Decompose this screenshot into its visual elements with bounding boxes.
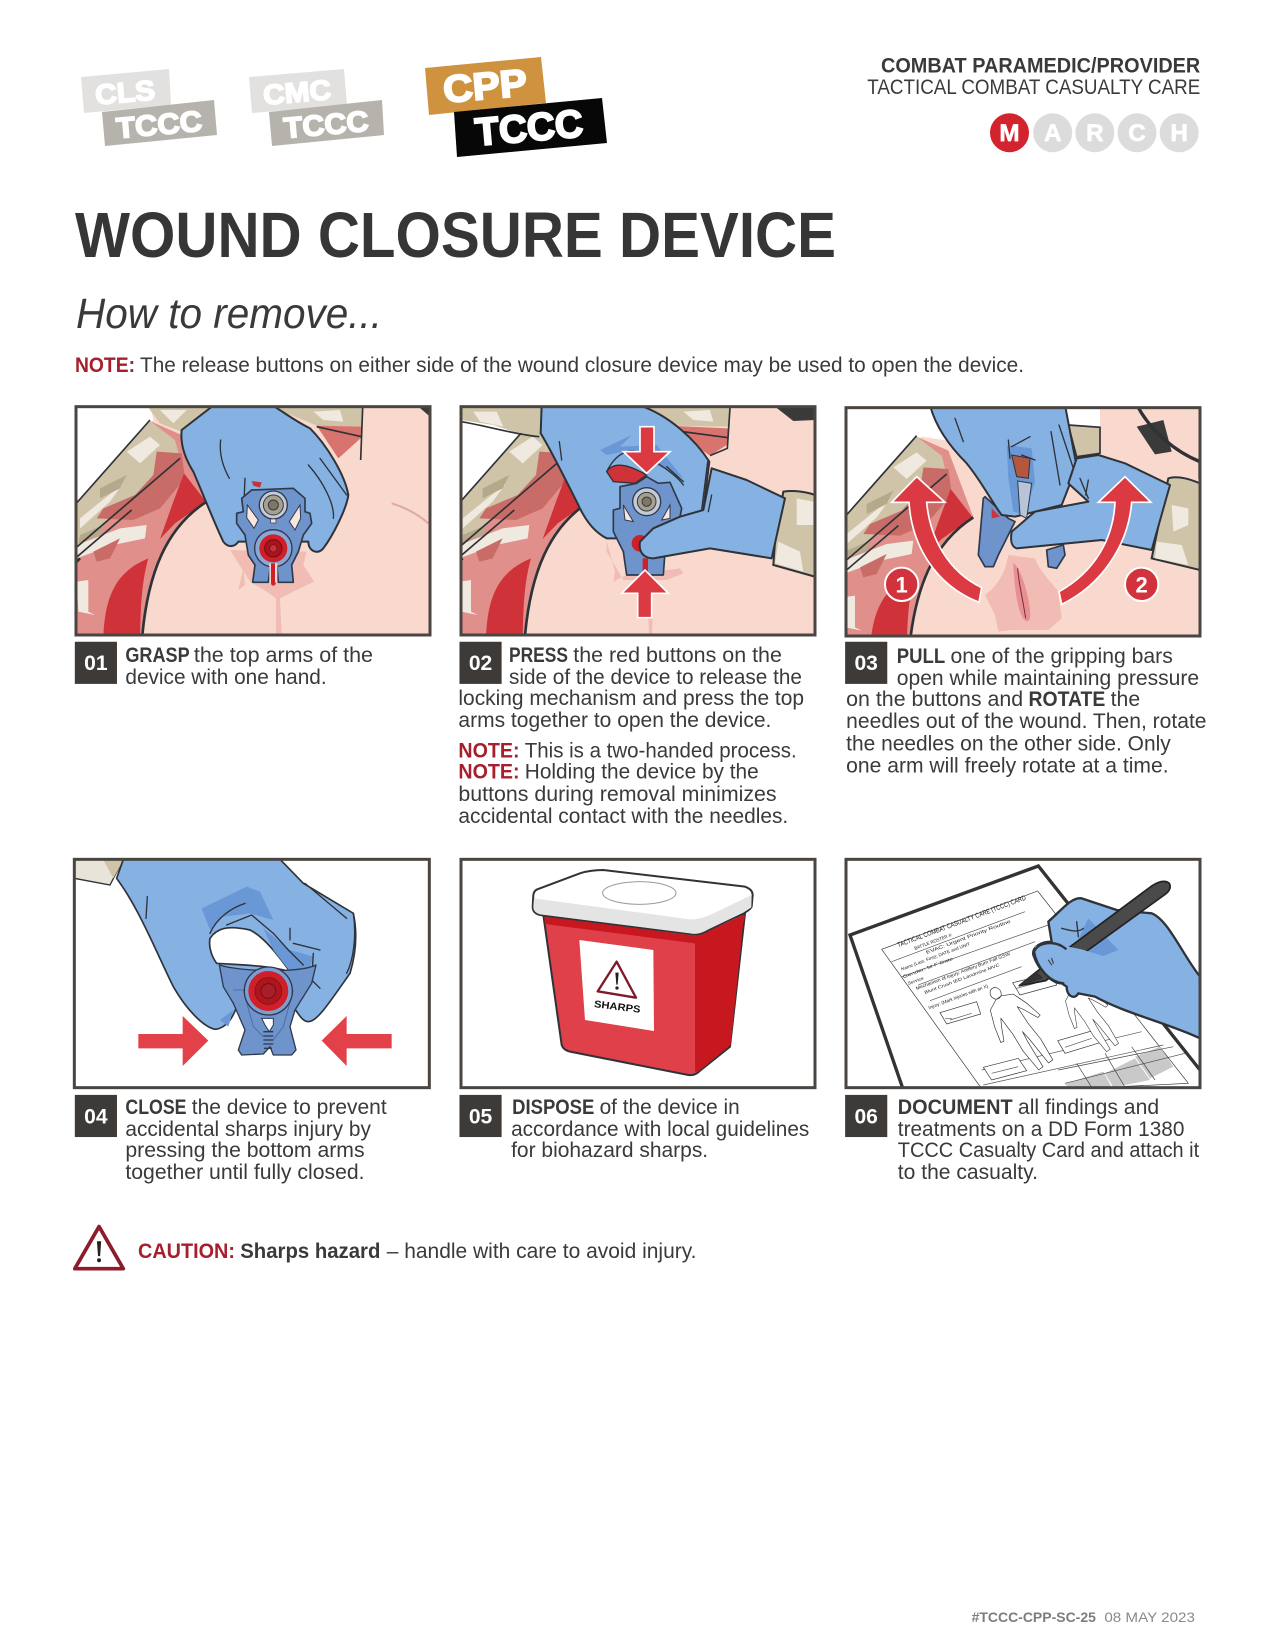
casualty card form: Mechanism of Injury: Artillery Burn Fall GSW (915, 951, 1011, 991)
M active (990, 113, 1029, 152)
step 02 text: NOTE: (458, 739, 520, 763)
step 03 text: the (1111, 687, 1140, 711)
illustration: grasp device (74, 405, 432, 636)
A: A (1044, 120, 1061, 147)
illustration: press buttons (460, 405, 816, 636)
step number 02: 02 (469, 652, 492, 675)
R: R (1086, 120, 1104, 147)
logo: CMC TCCC: TCCC (282, 106, 370, 145)
step 01 text: device with one hand. (125, 665, 327, 689)
illustration: close device (74, 859, 429, 1088)
step 04 text: CLOSE (125, 1095, 187, 1119)
logo: CPP TCCC (425, 57, 607, 157)
caution text: CAUTION: (138, 1239, 235, 1263)
step 05 text: for biohazard sharps. (511, 1138, 708, 1162)
logo: CPP TCCC: CPP (442, 62, 529, 112)
step 02 text: locking mechanism and press the top (458, 686, 804, 710)
step 06 text: TCCC Casualty Card and attach it (898, 1138, 1199, 1162)
step 04 text: accidental sharps injury by (125, 1117, 371, 1141)
step 03 text (846, 644, 1207, 777)
casualty card form: Blunt Crush IED Landmine MVC (924, 962, 1000, 995)
step 03 text: PULL (897, 644, 945, 668)
illustration: document on casualty card (846, 859, 1200, 1093)
step 03 text: on the buttons and (846, 687, 1023, 711)
casualty card form: Service (907, 975, 925, 986)
step number 04: 04 (84, 1105, 108, 1128)
H: H (1170, 120, 1188, 147)
step 02 text: side of the device to release the (509, 665, 802, 689)
logo: CLS TCCC: TCCC (115, 106, 203, 145)
casualty card form: BATTLE ROSTER #: (914, 932, 953, 951)
step number 01: 01 (84, 652, 108, 675)
step 03 text: open while maintaining pressure (897, 666, 1199, 690)
step 02 text: arms together to open the device. (458, 708, 771, 732)
panel: step 03 (827, 405, 1207, 777)
illustration: pull and rotate: 2 (1136, 572, 1148, 597)
step 05 text: of the device in (600, 1095, 740, 1119)
logo: CPP TCCC: TCCC (473, 102, 585, 155)
step number 03 (845, 642, 887, 684)
footer: document id and date (972, 1610, 1195, 1626)
body diagram front (990, 987, 1054, 1070)
panel: step 01 (60, 395, 430, 689)
step 06 text (898, 1095, 1199, 1184)
step 01 text: GRASP (125, 643, 190, 667)
step 03 text: one arm will freely rotate at a time. (846, 753, 1169, 777)
step 02 text: the red buttons on the (573, 643, 782, 667)
step 05 text (511, 1095, 809, 1162)
panel: step 02 (443, 395, 815, 828)
step 02 text: NOTE: (458, 760, 520, 784)
step 04 text: pressing the bottom arms (125, 1138, 365, 1162)
header: course name: TACTICAL COMBAT CASUALTY CARE (867, 76, 1200, 99)
step 06 text: DOCUMENT (898, 1095, 1013, 1119)
step 03 text: the needles on the other side. Only (846, 731, 1171, 755)
icon: warning triangle (75, 1227, 123, 1269)
step number 03: 03 (854, 652, 878, 675)
step number 02 (459, 642, 502, 684)
step 03 text: ROTATE (1028, 687, 1105, 711)
casualty card form: Gender: M F Date (902, 956, 954, 979)
container body (543, 913, 745, 1075)
top note: NOTE: (75, 353, 135, 377)
logo row (81, 57, 607, 157)
step 01 text (125, 643, 373, 689)
A (1033, 113, 1072, 152)
step 03 text: needles out of the wound. Then, rotate (846, 709, 1207, 733)
logo: CMC TCCC: CMC (262, 74, 332, 111)
panel: step 06 (845, 859, 1200, 1184)
logo: CLS TCCC: CLS (94, 74, 156, 111)
casualty card form (882, 891, 1188, 1093)
body diagram back (1065, 995, 1119, 1052)
step 06 text: all findings and (1018, 1095, 1159, 1119)
casualty card form: EVAC: Urgent Priority Routine (925, 919, 1012, 955)
step 05 text: DISPOSE (512, 1095, 594, 1119)
title: WOUND CLOSURE DEVICE (75, 199, 836, 271)
step 06 text: treatments on a DD Form 1380 (898, 1117, 1184, 1141)
casualty card form: TACTICAL COMBAT CASUALTY CARE (TCCC) CARD (897, 895, 1027, 949)
caution callout (75, 1227, 696, 1269)
step 02 text: accidental contact with the needles. (458, 804, 788, 828)
step 06 text: to the casualty. (898, 1160, 1038, 1184)
R (1075, 113, 1114, 152)
step 04 text: the device to prevent (192, 1095, 387, 1119)
M active: M (999, 120, 1020, 147)
illustration: pull and rotate: 1 (896, 572, 908, 597)
panel: step 04 (74, 859, 429, 1184)
step number 06 (845, 1095, 887, 1137)
header: course name (867, 55, 1200, 99)
step 03 text: one of the gripping bars (950, 644, 1173, 668)
C: C (1128, 120, 1146, 147)
caution text: – handle with care to avoid injury. (387, 1239, 696, 1263)
caution text: Sharps hazard (240, 1239, 380, 1263)
logo: CMC TCCC (249, 69, 384, 146)
header: course name: COMBAT PARAMEDIC/PROVIDER (881, 55, 1200, 78)
step 02 text (458, 643, 804, 828)
step number 06: 06 (854, 1105, 878, 1128)
step number 04 (75, 1095, 117, 1137)
footer: document id and date: #TCCC-CPP-SC-25 (972, 1610, 1096, 1626)
step number 01 (75, 642, 117, 684)
index finger (1034, 945, 1103, 978)
panel: step 05 (459, 859, 815, 1162)
MARCH indicator (990, 113, 1199, 152)
illustration: sharps container (461, 859, 815, 1088)
casualty card form: Injury: (Mark injuries with an X) (928, 983, 989, 1010)
gloved hand (1033, 898, 1200, 1038)
top note: The release buttons on either side of the wound closure device may be used to open the device. (140, 353, 1024, 377)
step 01 text: the top arms of the (194, 643, 373, 667)
step number 05 (459, 1095, 502, 1137)
sharps label: SHARPS (593, 999, 641, 1016)
C (1118, 113, 1156, 152)
step number 05: 05 (469, 1105, 493, 1128)
sharps label (579, 940, 654, 1031)
H (1160, 113, 1199, 152)
step 04 text: together until fully closed. (125, 1160, 365, 1184)
footer: document id and date: 08 MAY 2023 (1104, 1610, 1195, 1626)
subtitle: How to remove... (76, 290, 382, 338)
pen (1019, 881, 1170, 986)
step 02 text: buttons during removal minimizes (458, 782, 777, 806)
logo: CLS TCCC (81, 69, 217, 146)
caution text (138, 1239, 696, 1263)
step 05 text: accordance with local guidelines (511, 1117, 809, 1141)
casualty card form: Name (Last, First): DATE and UNIT (900, 941, 971, 972)
step 04 text (125, 1095, 387, 1184)
step 02 text: PRESS (509, 643, 568, 667)
illustration: pull and rotate (844, 406, 1202, 638)
container lid (533, 870, 753, 934)
treatment table (1065, 1047, 1173, 1087)
step 02 text: This is a two-handed process. (525, 739, 797, 763)
step 02 text: Holding the device by the (525, 760, 759, 784)
